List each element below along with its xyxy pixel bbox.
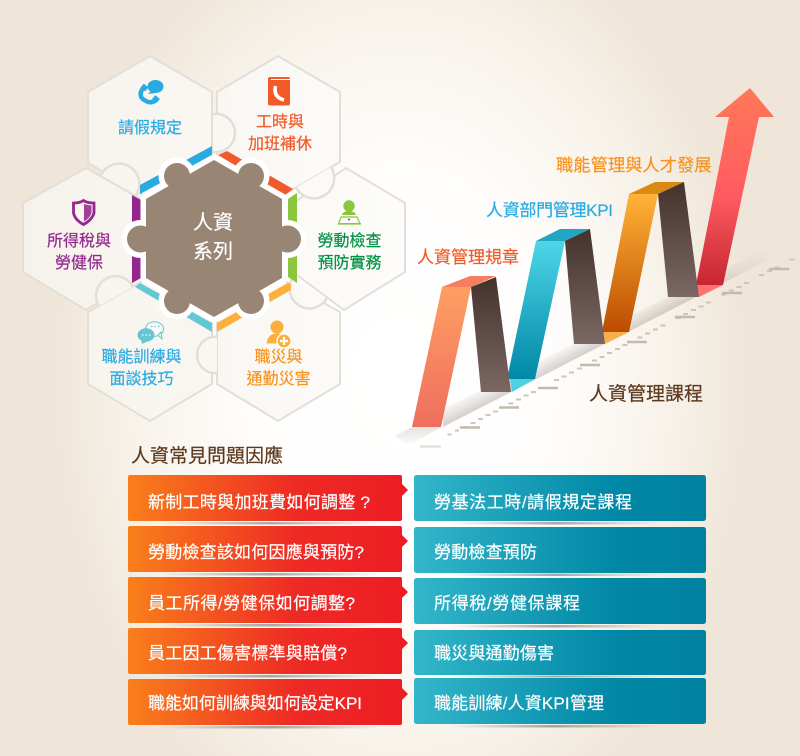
ribbon: 職能管理與人才發展 yellow	[602, 182, 684, 344]
answer row 5: 職能訓練/人資KPI管理	[434, 694, 604, 713]
label: 職能訓練與面談技巧: 職能訓練與	[101, 348, 182, 366]
icon: book with phone	[268, 77, 290, 106]
answer row 2: 勞動檢查預防	[434, 543, 537, 562]
icon: phone and speech bubble	[141, 80, 164, 103]
panel: 請假規定 hexagon	[88, 56, 212, 199]
label: 職災與通勤災害: 職災與	[254, 348, 303, 366]
label: 勞動檢查預防實務	[317, 232, 382, 272]
question row 3: 員工所得/勞健保如何調整?	[148, 594, 355, 613]
question row 1	[128, 475, 408, 521]
answer row 3	[414, 578, 706, 624]
label: 職災與通勤災害: 通勤災害	[246, 370, 311, 388]
button shadows	[160, 522, 660, 728]
panel: 工時與加班補休 hexagon	[217, 56, 340, 198]
centre title: 人資	[193, 211, 233, 234]
icon: person at laptop	[338, 200, 361, 224]
centre hexagon	[127, 160, 301, 317]
label: 所得稅與勞健保	[47, 232, 111, 272]
label: 請假規定: 請假規定	[118, 119, 182, 137]
ground shadow	[396, 264, 756, 441]
question row 2: 勞動檢查該如何因應與預防?	[148, 542, 364, 562]
panel: 職能訓練與面談技巧 hexagon	[88, 277, 212, 421]
ground dashes	[420, 260, 794, 446]
question row 2	[128, 526, 408, 572]
label: 所得稅與勞健保: 所得稅與	[47, 232, 111, 250]
icon: person with plus	[266, 320, 291, 348]
panel: 所得稅與勞健保 hexagon	[23, 168, 148, 310]
label: 人資部門管理KPI: 人資部門管理KPI	[486, 201, 613, 220]
ribbon growth chart: 人資管理課程	[395, 88, 794, 446]
heading: 人資常見問題因應: 人資常見問題因應	[131, 444, 283, 467]
answer row 4: 職災與通勤傷害	[434, 644, 554, 663]
label: 勞動檢查預防實務: 勞動檢查	[317, 232, 382, 250]
label: 職能管理與人才發展: 職能管理與人才發展	[556, 155, 712, 175]
question row 3	[128, 577, 408, 623]
ribbon: dark folds	[471, 182, 699, 392]
label: 工時與加班補休: 加班補休	[248, 135, 312, 153]
answer row 3: 所得稅/勞健保課程	[434, 594, 580, 613]
question row 1: 新制工時與加班費如何調整 ?	[148, 493, 370, 512]
label: 工時與加班補休: 工時與	[256, 113, 304, 131]
hexagon puzzle diagram: 人資系列	[23, 56, 405, 421]
answer row 4	[414, 630, 706, 675]
panel: 職災與通勤災害 hexagon	[217, 277, 340, 421]
label: 職能訓練與面談技巧: 面談技巧	[109, 370, 174, 388]
puzzle connectors	[96, 114, 334, 373]
answer row 5	[414, 678, 706, 724]
ribbon: 人資管理規章 orange	[412, 276, 496, 427]
ribbon: 人資部門管理KPI blue	[507, 229, 590, 392]
answer row 1	[414, 475, 706, 521]
coloured ring segments	[132, 146, 297, 332]
question row 4	[128, 628, 408, 674]
icon: shield	[74, 200, 94, 224]
answer row 2	[414, 527, 706, 573]
panel: 勞動檢查預防實務 hexagon	[293, 168, 405, 310]
label: 人資管理規章: 人資管理規章	[417, 248, 519, 267]
label: 職能訓練與面談技巧	[101, 348, 182, 388]
question row 5	[128, 679, 408, 725]
ribbon: red arrow	[696, 88, 774, 297]
label: 工時與加班補休	[248, 113, 312, 153]
icon: chat bubbles	[138, 322, 164, 344]
question row 4: 員工因工傷害標準與賠償?	[148, 644, 347, 663]
label: 所得稅與勞健保: 勞健保	[55, 254, 103, 272]
label: 職災與通勤災害	[246, 348, 311, 388]
label: 人資管理課程: 人資管理課程	[589, 383, 703, 405]
answer row 1: 勞基法工時/請假規定課程	[434, 493, 632, 512]
centre hexagon: 系列	[193, 240, 233, 263]
label: 勞動檢查預防實務: 預防實務	[317, 253, 382, 272]
question row 5: 職能如何訓練與如何設定KPI	[148, 694, 362, 713]
